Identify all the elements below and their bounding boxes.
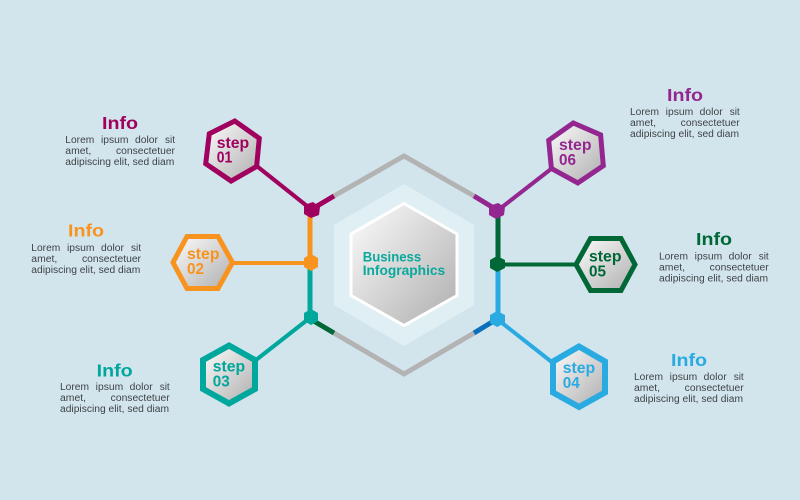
info text: dolor [135,135,159,146]
info text: Info [68,221,104,241]
info text: amet, [634,383,660,394]
node [304,309,318,325]
step label: step [559,137,592,154]
info text [659,229,769,284]
dark green stub [312,320,334,333]
blue spine [496,264,500,319]
hexagon badge [173,236,232,288]
info text: sit [131,243,141,254]
info text [634,350,744,405]
center title: Infographics [363,262,445,278]
hexagon badge [206,121,259,181]
step label [559,137,592,169]
dark blue stub [474,319,497,333]
inner gradient hexagon [351,204,457,326]
info text: amet, [65,146,91,157]
node [490,256,505,272]
info text: Info [667,85,703,105]
info text [630,85,740,140]
step label: 06 [559,152,576,169]
info text: sit [160,382,170,393]
info text: Lorem [31,243,60,254]
step label: 03 [213,374,230,391]
step 04 [490,311,744,407]
info text: amet, [630,118,656,129]
step 06 [489,85,740,219]
info text [65,113,176,168]
step label: step [213,359,245,376]
info text [31,221,142,276]
info text: ipsum [96,382,123,393]
info text: Lorem [65,135,94,146]
central hexagon diagram [334,156,474,374]
connector [497,262,576,266]
step label: 04 [563,375,580,392]
step label: step [187,246,220,263]
info text: consectetuer [116,146,176,157]
step label: step [217,135,249,152]
node [304,202,320,218]
outer gray hexagon frame [334,156,474,196]
info text: adipiscing elit, sed diam [65,157,174,168]
step label: 02 [187,261,204,278]
info text: consectetuer [111,393,170,404]
node [489,203,505,219]
outer gray hexagon frame bottom [334,333,474,374]
info text: ipsum [666,107,693,118]
center title [363,249,445,278]
info text: consectetuer [685,383,744,394]
hexagon badge [203,346,255,404]
step 01 [65,113,320,218]
connector [258,167,312,210]
step label [589,249,622,280]
step 05 [490,229,769,290]
purple stub [474,196,497,210]
info text: amet, [60,393,86,404]
info text: sit [759,251,769,262]
info text: Lorem [60,382,89,393]
step label: 05 [589,264,606,280]
step label [187,246,220,278]
info text: ipsum [101,135,129,146]
info text: sit [730,107,740,118]
light middle hexagon [334,184,474,346]
info text: consectetuer [82,254,142,265]
info text: adipiscing elit, sed diam [630,129,739,140]
info text: Lorem [634,372,663,383]
step label [563,360,595,392]
teal spine [308,262,312,318]
info text: Info [696,229,732,249]
info text: adipiscing elit, sed diam [634,394,743,405]
info text: ipsum [67,243,94,254]
magenta stub [312,196,334,209]
info text: dolor [704,372,727,383]
info text: sit [165,135,175,146]
info text: adipiscing elit, sed diam [659,273,768,284]
step 03 [60,309,318,415]
info text: Info [97,361,133,381]
info text: Info [671,350,707,370]
green spine [496,212,500,264]
step label [213,359,245,391]
step 02 [31,221,318,288]
info text: dolor [130,382,153,393]
info text: ipsum [695,251,722,262]
step label [217,135,249,167]
info text: amet, [659,262,685,273]
info text: adipiscing elit, sed diam [31,265,140,276]
info text: sit [734,372,744,383]
info text: consectetuer [681,118,740,129]
hexagon badge [549,123,603,183]
node [304,254,318,271]
info text: amet, [31,254,57,265]
hexagon badge [576,238,635,290]
info text: Info [102,113,138,133]
info text: Lorem [630,107,659,118]
step label: step [589,249,622,266]
info text: Lorem [659,251,688,262]
info text: dolor [700,107,723,118]
info text: ipsum [670,372,697,383]
info text: consectetuer [710,262,769,273]
connector [497,169,551,211]
orange spine [308,212,312,262]
hexagon badge [553,346,605,407]
connector spine left and right [310,196,498,333]
info text: adipiscing elit, sed diam [60,404,169,415]
connector [497,319,553,363]
node [490,311,505,327]
info text [60,361,170,415]
info text: dolor [101,243,125,254]
center title: Business [363,249,421,265]
step label: step [563,360,595,377]
step label: 01 [217,150,232,167]
connector [256,317,311,360]
info text: dolor [729,251,752,262]
connector [234,261,310,265]
